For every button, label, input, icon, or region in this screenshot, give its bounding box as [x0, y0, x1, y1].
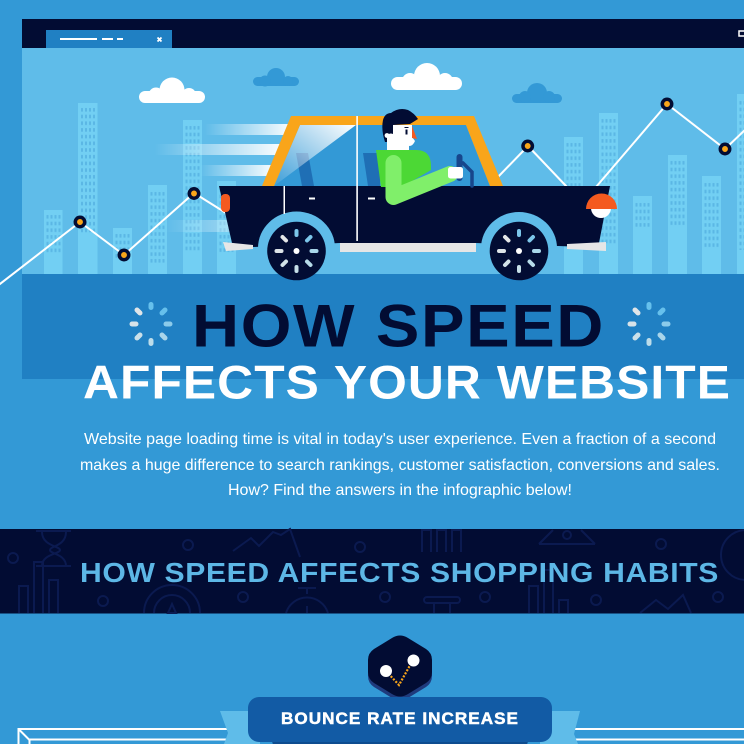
car cabin window [274, 125, 490, 186]
head light [586, 194, 617, 218]
skyline buildings [44, 94, 744, 274]
cloud: white left [139, 78, 205, 103]
intro paragraph: How? Find the answers in the infographic below! [228, 482, 572, 499]
driver arm [394, 163, 450, 197]
banner: bounce rate increase: BOUNCE RATE INCREASE [281, 710, 519, 728]
section title: HOW SPEED AFFECTS SHOPPING HABITS [80, 557, 719, 588]
loading spinner right [630, 304, 668, 344]
loading spinner left [132, 304, 170, 344]
front wheel [267, 222, 326, 280]
line chart [0, 99, 744, 286]
driver eye [406, 130, 408, 134]
tail light [221, 194, 230, 212]
cloud: blue left [253, 68, 299, 86]
driver hair [382, 109, 418, 142]
window lower band [22, 274, 744, 379]
driver neck and head [387, 125, 415, 150]
car body [219, 186, 610, 247]
banner: bounce rate increase [248, 697, 552, 742]
band icon pattern [8, 529, 744, 613]
driver sweater [376, 150, 431, 187]
hexagon icon [368, 636, 432, 700]
intro paragraph: makes a huge difference to search rankings, customer satisfaction, conversions and sales. [80, 457, 720, 474]
section band [0, 529, 744, 614]
window title bar [22, 19, 744, 48]
white box outline below banner [18, 729, 744, 744]
intro paragraph [80, 431, 720, 499]
driver nose [412, 126, 417, 139]
cloud: blue right [512, 83, 562, 103]
driver hand [448, 167, 463, 178]
door lines [284, 116, 375, 241]
cloud: white right [391, 63, 462, 90]
steering wheel [460, 157, 472, 186]
car roof frame [262, 116, 503, 186]
hexagon face [368, 636, 432, 696]
wheel arches [258, 212, 557, 248]
windshield glare [274, 125, 356, 186]
browser window hero [0, 19, 744, 379]
ribbon tail left [220, 711, 260, 744]
bumpers and sill [223, 242, 606, 252]
hexagon shadow [368, 638, 432, 700]
title: affects your website: AFFECTS YOUR WEBSITE [83, 356, 731, 408]
banner shadow [272, 720, 528, 744]
car seats [296, 153, 380, 186]
speed lines [155, 124, 290, 232]
ribbon tail right [540, 711, 580, 744]
driver [376, 109, 463, 197]
window sky [22, 48, 744, 274]
intro paragraph: Website page loading time is vital in today's user experience. Even a fraction of a second [84, 431, 716, 448]
bounce arrow [380, 654, 420, 685]
car [219, 109, 617, 280]
title: how speed: HOW SPEED [192, 292, 605, 360]
rear wheel [490, 222, 548, 280]
